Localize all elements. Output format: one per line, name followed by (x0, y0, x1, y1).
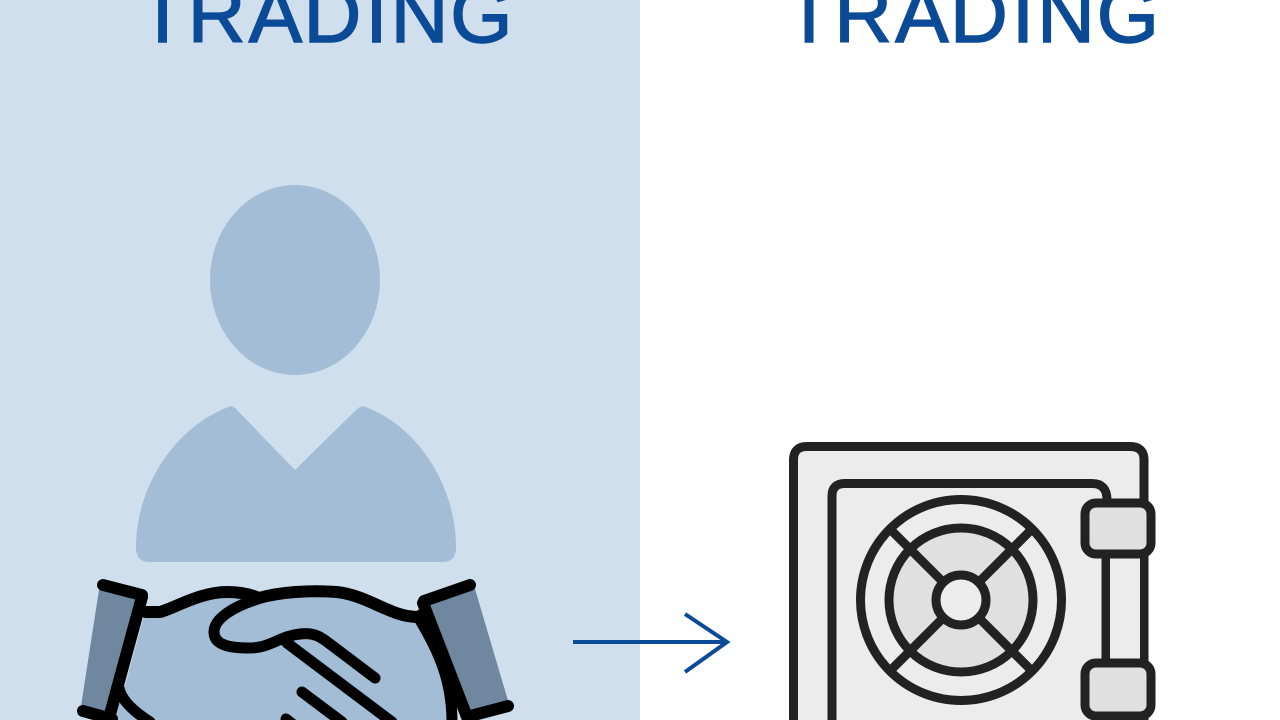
icon: person silhouette (136, 185, 456, 562)
small finger tip (286, 719, 300, 720)
finger line (287, 643, 392, 720)
left lower edge (119, 688, 150, 720)
right cuff outline (423, 585, 508, 717)
lower finger (302, 692, 342, 720)
icon: safe (794, 446, 1151, 720)
safe body (794, 446, 1144, 720)
bottom hinge (1085, 663, 1151, 716)
top hinge (1085, 503, 1151, 554)
upper hand outlines (146, 591, 423, 617)
right palm edge (420, 620, 452, 720)
icon: handshake (81, 585, 509, 720)
safe door (832, 484, 1107, 720)
handle bar (1106, 550, 1144, 670)
left cuff (81, 590, 142, 716)
right cuff (423, 589, 509, 717)
panel: left background (0, 0, 640, 720)
hands fill (110, 591, 447, 720)
arrow (573, 614, 727, 672)
thumb and index finger (214, 599, 375, 678)
left cuff outline (83, 585, 142, 719)
dial (860, 500, 1062, 700)
